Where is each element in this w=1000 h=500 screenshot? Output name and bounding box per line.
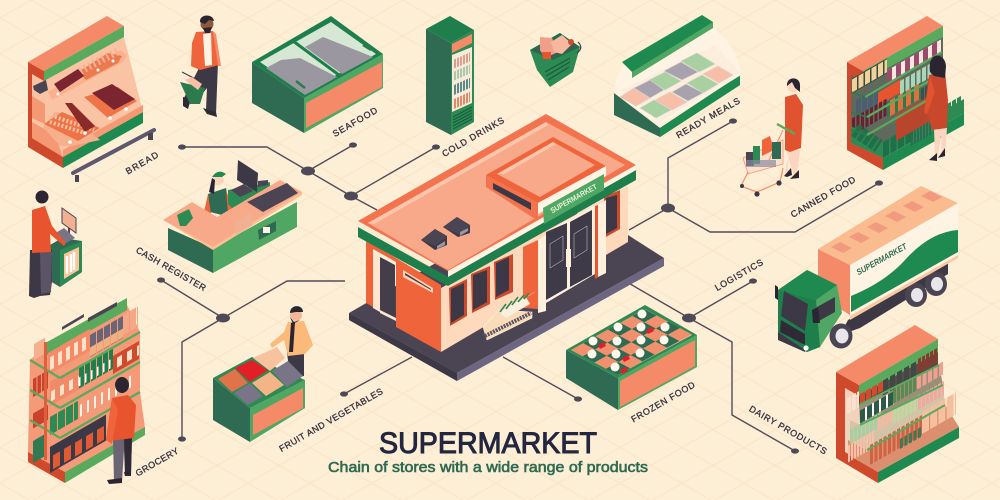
shopping cart [740,130,783,197]
central supermarket building [349,114,664,381]
lower green product block [851,99,964,158]
truck chassis [840,262,948,335]
figure: man with basket [180,15,221,117]
label: bread: BREAD [124,149,161,176]
card reader [258,221,276,240]
panel: ready meals counter [614,15,741,137]
panel: fruit and vegetables stand [213,306,313,442]
title: SUPERMARKET [379,427,597,460]
upper trays of bread [33,50,127,100]
entrance doors and pillars [523,200,606,313]
shelf edges [30,332,140,438]
shelf edges [865,52,945,135]
rear wheels [905,272,947,307]
panel: bread display [28,16,154,182]
building base plate [349,200,664,381]
label: ready meals: READY MEALS [674,96,742,140]
top canopy [28,16,124,71]
front and left walls [366,186,628,352]
display crate [213,378,250,442]
scale screen [62,208,76,233]
cashier figure [204,172,234,215]
product rows [33,316,139,464]
storefront sign [543,174,604,224]
cargo box [818,186,958,320]
lower trays of bread [43,80,137,146]
product rows [847,355,956,455]
panel: canned food shelf [847,16,964,170]
computer monitor and back desk [228,160,270,212]
label: cold drinks: COLD DRINKS [440,115,506,159]
storefront sign: SUPERMARKET [549,182,599,215]
label: fruit and vegetables: FRUIT AND VEGETABLES [277,386,385,454]
cargo box: SUPERMARKET [855,241,909,277]
customer [29,250,52,298]
panel: dairy products shelf [836,325,959,483]
small basket on desk [177,209,193,226]
top canopy [847,16,943,71]
panel: frozen food crate [566,305,697,410]
raised sign block with skylight [486,137,606,221]
roof vents [421,217,470,250]
shelf edges [859,365,945,450]
panel: cold drinks fridge [426,16,474,135]
figure: woman with cart [740,78,803,197]
icon: shopping basket [530,33,581,87]
label: canned food: CANNED FOOD [789,174,858,220]
label: dairy products: DAIRY PRODUCTS [747,404,829,456]
produce bins [218,347,303,405]
subtitle: Chain of stores with a wide range of products [328,459,648,476]
front wheel [830,324,852,348]
panel: seafood freezer [252,16,383,133]
label: grocery: GROCERY [134,446,180,478]
figure: woman at shelf [924,55,948,161]
product rows [852,46,941,127]
kiosk [50,238,82,287]
frozen food cells [571,309,692,375]
desk body [168,228,213,273]
panel: grocery gondola [28,298,145,484]
label: logistics: LOGISTICS [713,257,765,293]
roof [358,114,636,286]
shelf body [28,37,143,157]
label: seafood: SEAFOOD [331,105,380,139]
top canopy [836,325,938,385]
truck cab [775,270,842,352]
figure: self-checkout customer and kiosk [29,190,82,298]
figure: greengrocer [270,306,313,378]
panel: cash register desk [163,160,302,273]
connector lines [157,118,883,454]
front windows [449,190,620,326]
shelf tier backing [848,352,959,472]
figure: customer [106,377,136,484]
shopping carts row [483,292,535,340]
label: frozen food: FROZEN FOOD [629,379,697,424]
front rail [73,130,154,173]
label: cash register: CASH REGISTER [134,245,208,293]
panel: delivery truck [775,186,958,352]
